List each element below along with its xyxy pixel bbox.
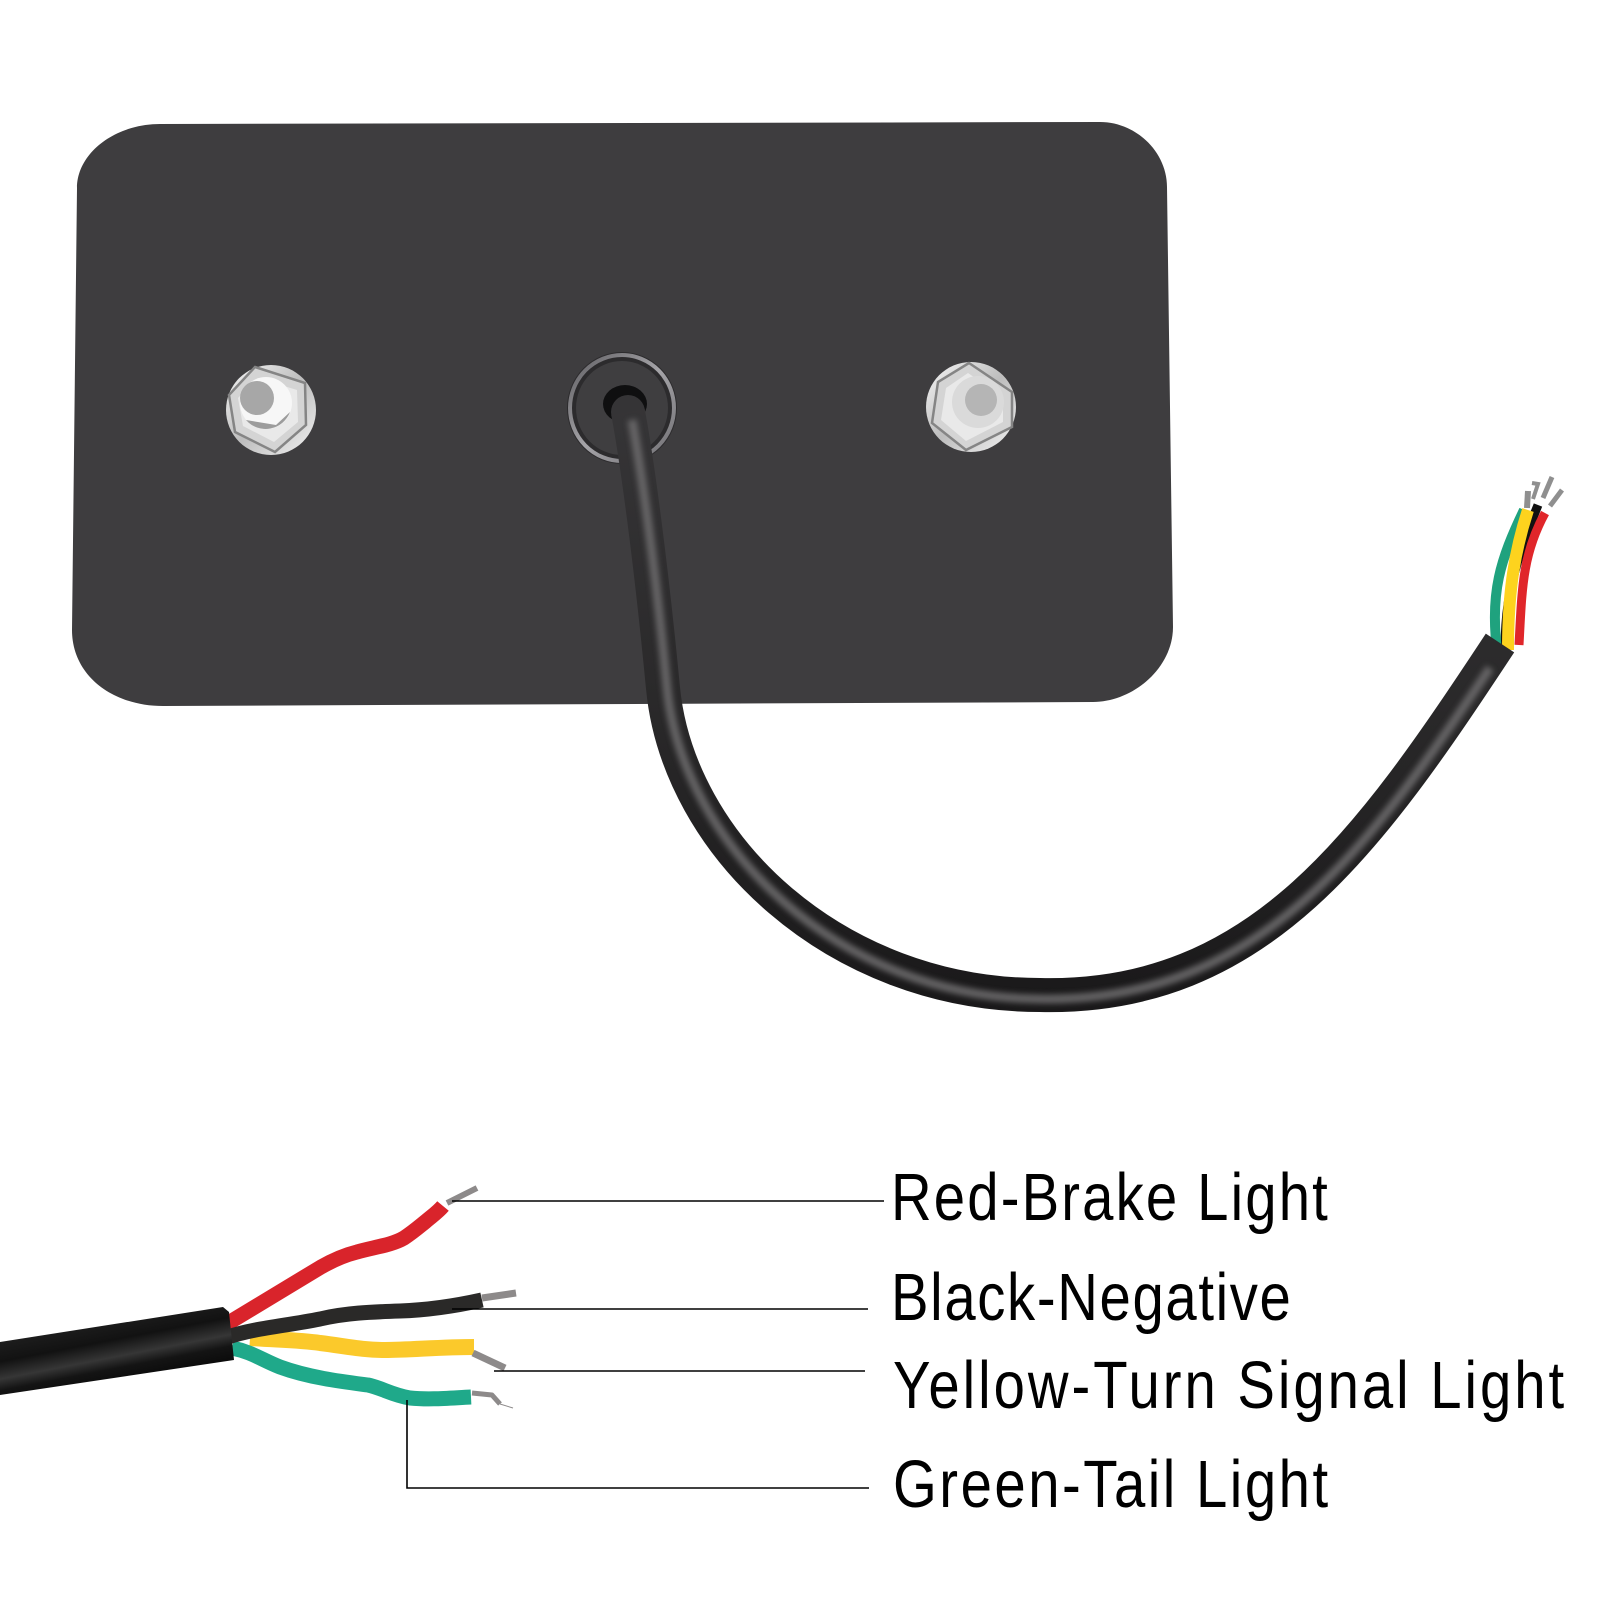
label: yellow wire: Yellow-Turn Signal Light — [893, 1348, 1564, 1423]
leader: green — [407, 1400, 869, 1488]
close-up: black cable jacket — [0, 1307, 234, 1395]
wire: red brake — [225, 1188, 477, 1325]
wire: black negative — [228, 1293, 516, 1337]
label: green wire: Green-Tail Light — [893, 1447, 1328, 1522]
leader lines — [407, 1201, 884, 1488]
label: black wire: Black-Negative — [891, 1260, 1291, 1335]
wire: green tail — [232, 1348, 513, 1408]
icon: right bolt and nut — [926, 362, 1016, 452]
icon: left bolt and nut — [226, 365, 316, 455]
icon: rubber grommet — [567, 352, 677, 464]
small stripped wires at cable end — [1495, 477, 1562, 650]
leader: yellow — [494, 1370, 865, 1372]
leader: black — [452, 1308, 868, 1310]
label: red wire: Red-Brake Light — [891, 1160, 1328, 1235]
leader: red — [452, 1200, 884, 1202]
panel: mounting plate back — [72, 122, 1173, 706]
wire: yellow turn signal — [250, 1338, 505, 1368]
close-up: four coloured wires — [225, 1188, 516, 1408]
sheathed cable loop — [611, 395, 1500, 999]
